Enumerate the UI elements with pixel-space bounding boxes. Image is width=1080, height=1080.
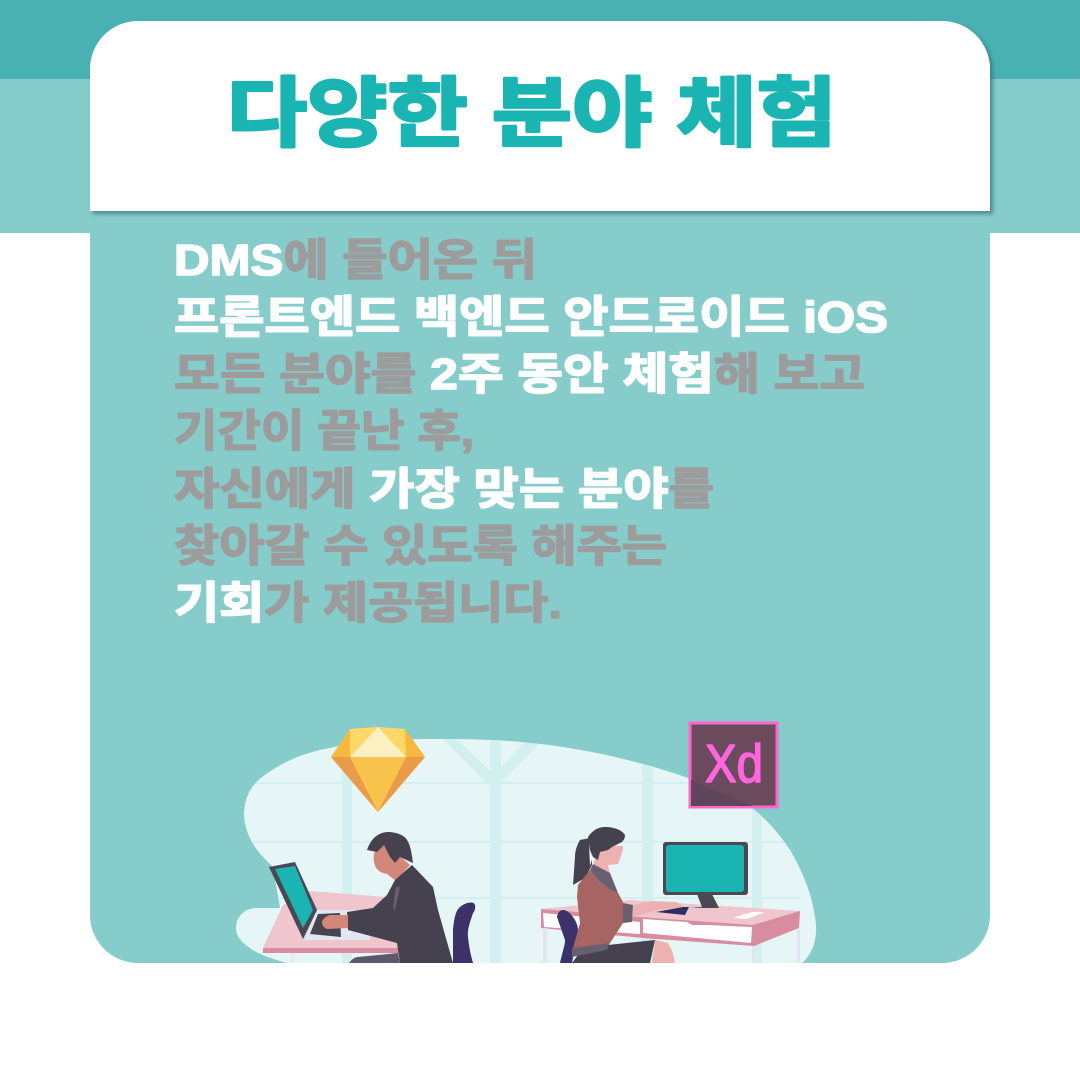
icon: adobe xd bbox=[690, 723, 777, 807]
trousers bbox=[349, 953, 400, 963]
hair top bbox=[588, 827, 625, 860]
icon: adobe xd: Xd bbox=[705, 734, 763, 794]
hand bbox=[322, 915, 348, 929]
body text bbox=[174, 236, 888, 628]
header band: dark teal bbox=[0, 0, 1080, 79]
head bbox=[593, 846, 623, 875]
sleeve cuff bbox=[623, 903, 633, 923]
monitor bbox=[663, 842, 748, 895]
icon: sketch diamond bbox=[331, 727, 425, 812]
skirt bbox=[572, 940, 655, 963]
head bbox=[374, 845, 410, 880]
line 7: 기회가 제공됩니다. bbox=[174, 579, 562, 628]
man at laptop bbox=[263, 832, 475, 963]
arm bbox=[633, 901, 683, 917]
jacket bbox=[573, 870, 623, 948]
tie bbox=[393, 887, 400, 910]
desk bbox=[541, 900, 800, 925]
title: 다양한 분야 체험 bbox=[227, 72, 837, 157]
laptop screen bbox=[269, 862, 317, 939]
header band: light teal bbox=[0, 79, 1080, 233]
chair bbox=[557, 910, 578, 963]
hair ponytail bbox=[573, 838, 592, 885]
shirt collar bbox=[590, 864, 618, 893]
desk bbox=[263, 891, 400, 948]
laptop base bbox=[304, 910, 372, 940]
line 5: 자신에게 가장 맞는 분야 를 bbox=[174, 465, 714, 514]
line 6: 찾아갈 수 있도록 해주는 bbox=[174, 522, 667, 571]
leg bbox=[652, 940, 675, 963]
tablet bbox=[656, 907, 689, 915]
line 3: 모든 분야를 2주 동안 체험 해 보고 bbox=[174, 350, 865, 399]
illustration: office scene bbox=[236, 723, 816, 963]
panel: white title card bbox=[90, 21, 990, 211]
body bbox=[347, 865, 453, 963]
chair bbox=[453, 903, 475, 963]
line 2: 프론트엔드 백엔드 안드로이드 iOS bbox=[174, 293, 888, 342]
woman at desk bbox=[541, 827, 800, 963]
background blob with window bbox=[236, 738, 816, 963]
panel: main teal content bbox=[90, 233, 990, 963]
line 4: 기간이 끝난 후, bbox=[174, 407, 474, 456]
hair bbox=[367, 832, 413, 863]
line 1: DMS 에 들어온 뒤 bbox=[174, 236, 537, 285]
shirt waist bbox=[572, 942, 610, 957]
